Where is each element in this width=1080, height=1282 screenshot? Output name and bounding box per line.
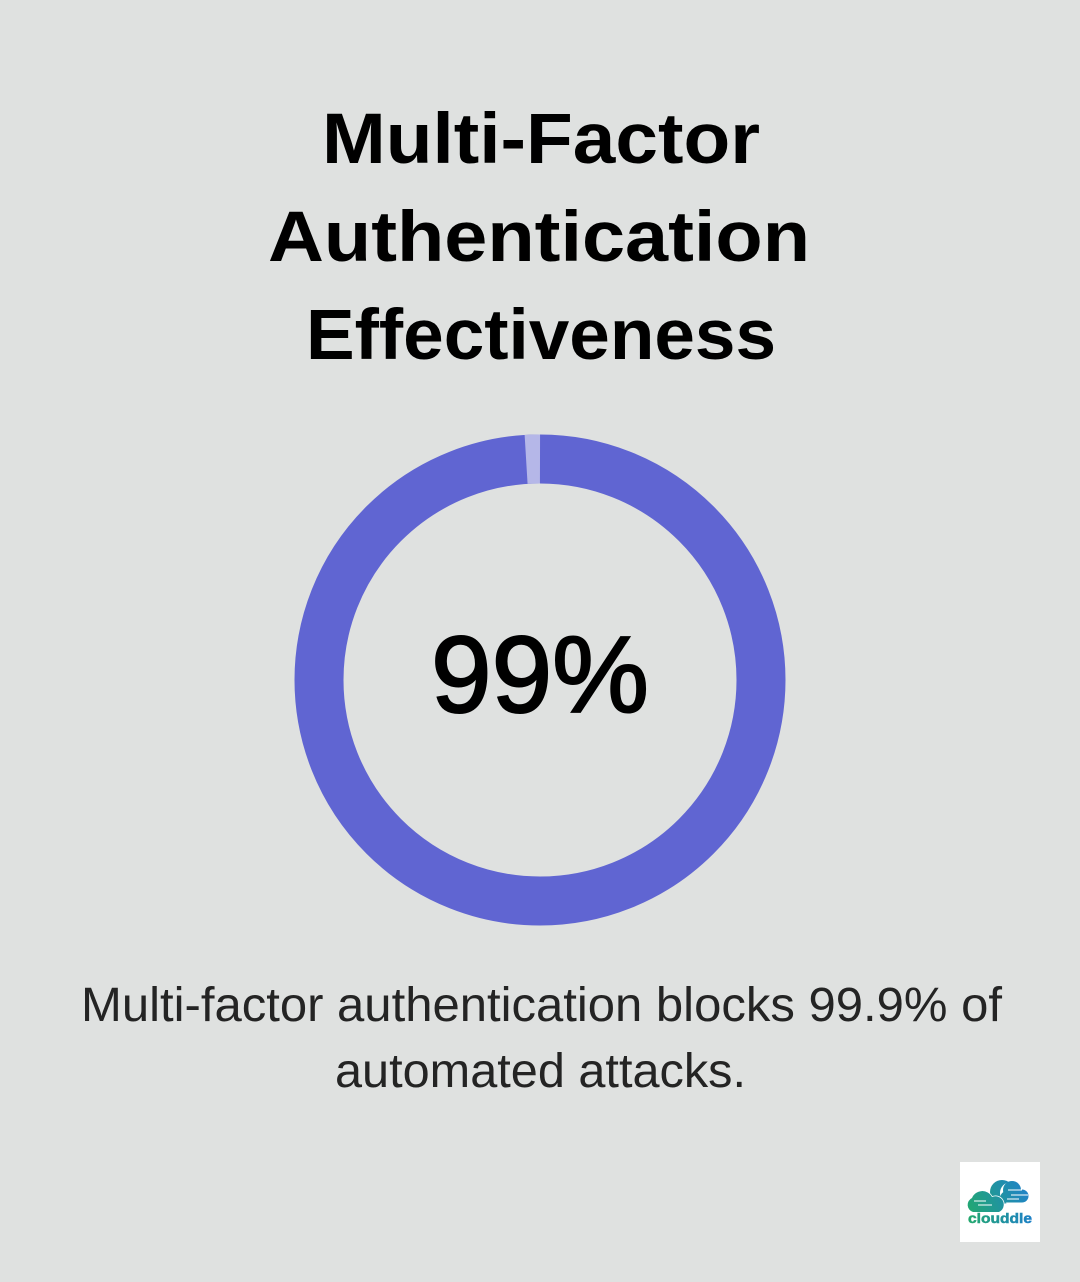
value: 99%: 99%: [431, 614, 649, 736]
title: [268, 100, 810, 375]
logo: clouddle: [960, 1162, 1040, 1242]
title: Multi-Factor: [322, 100, 760, 179]
icon: clouds: [968, 1180, 1028, 1212]
description: automated attacks.: [335, 1045, 746, 1098]
wordmark: clouddle: [968, 1211, 1033, 1226]
description: Multi-factor authentication blocks 99.9% of: [81, 979, 1003, 1032]
description: [81, 979, 1003, 1098]
title: Effectiveness: [306, 296, 776, 375]
donut chart: 99%: [319, 459, 761, 901]
title: Authentication: [268, 198, 810, 277]
